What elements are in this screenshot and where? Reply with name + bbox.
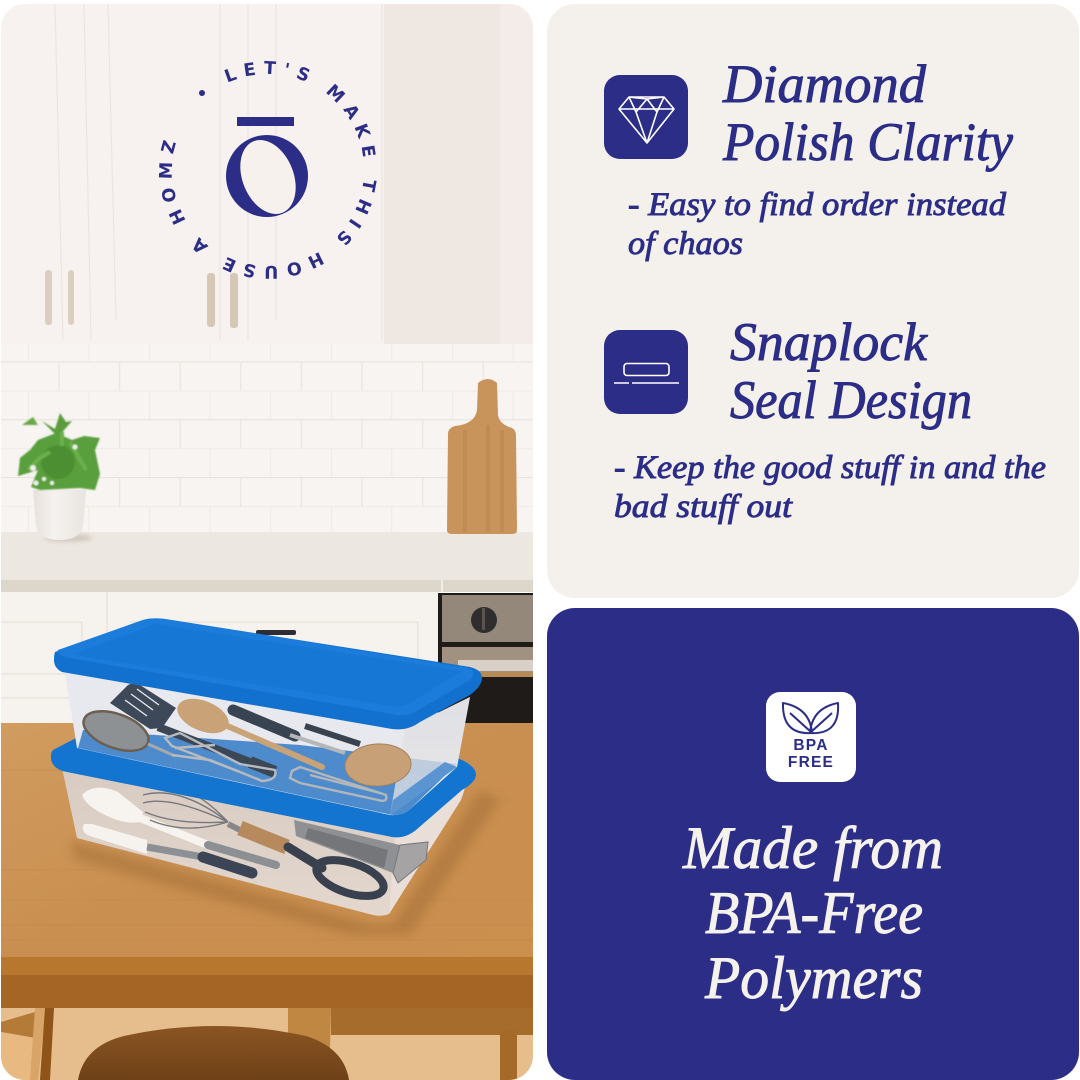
utensil: white spoon <box>82 788 276 865</box>
panel: kitchen photo <box>1 4 533 1080</box>
stacked storage containers <box>51 618 500 935</box>
top container blue base <box>78 730 457 815</box>
heading: made from bpa-free polymers <box>682 815 943 1011</box>
text: easy to find order: of chaos <box>628 226 743 262</box>
panel: features <box>547 4 1079 598</box>
heading: diamond polish clarity: Polish Clarity <box>722 112 1013 172</box>
utensil: scissors <box>288 847 388 903</box>
text: easy to find order <box>628 187 1007 262</box>
second blue lid <box>51 737 476 837</box>
utensil: white spatula <box>83 824 252 873</box>
icon: bpa free badge: FREE <box>788 754 834 771</box>
table shadow <box>70 790 500 935</box>
icon: snaplock seal <box>604 330 688 414</box>
icon: diamond <box>604 75 688 159</box>
utensil: skimmer <box>82 710 175 758</box>
text: keep the good stuff <box>614 450 1046 525</box>
utensil: whisk <box>143 789 228 828</box>
tiled wall <box>1 344 533 534</box>
bottom container body <box>62 768 466 916</box>
utensil: peeler <box>233 710 360 753</box>
heading: snaplock seal design <box>730 312 972 430</box>
panel: bpa free <box>547 608 1079 1080</box>
icon: bpa free badge <box>766 692 856 782</box>
text: keep the good stuff: - Keep the good stuff in and the <box>614 450 1046 486</box>
wooden table <box>1 723 533 1008</box>
top container body <box>65 672 470 815</box>
utensil: wooden spoon <box>172 692 322 767</box>
lower cabinets <box>1 592 439 726</box>
heading: made from bpa-free polymers: Made from <box>682 815 943 881</box>
circular tagline: LET'S MAKE THIS HOUSE A HOMZ <box>158 60 377 279</box>
cutting board <box>447 379 517 534</box>
oven <box>438 593 533 725</box>
icon: bpa free badge: BPA <box>793 737 829 754</box>
utensil: whisk handle <box>228 824 287 847</box>
floor, legs and chair <box>1 1008 533 1080</box>
heading: diamond polish clarity: Diamond <box>722 54 927 114</box>
utensil: tongs <box>290 767 386 801</box>
utensil: wooden ladle <box>344 742 412 788</box>
logo: circular brand mark <box>158 60 377 279</box>
utensil: grater <box>294 820 428 883</box>
heading: diamond polish clarity <box>722 54 1013 172</box>
heading: made from bpa-free polymers: BPA-Free <box>705 880 923 946</box>
bottom container side <box>389 785 466 914</box>
heading: snaplock seal design: Snaplock <box>730 312 928 372</box>
plant in white pot <box>18 413 100 542</box>
text: keep the good stuff: bad stuff out <box>614 489 793 525</box>
heading: snaplock seal design: Seal Design <box>730 370 972 430</box>
utensil: can opener <box>165 733 275 781</box>
top container side <box>390 697 470 815</box>
top blue lid <box>54 618 482 729</box>
utensil: slotted turner <box>110 684 275 772</box>
heading: made from bpa-free polymers: Polymers <box>704 945 923 1011</box>
countertop <box>1 532 533 592</box>
upper cabinets <box>1 4 533 346</box>
text: easy to find order: - Easy to find order instead <box>628 187 1007 223</box>
